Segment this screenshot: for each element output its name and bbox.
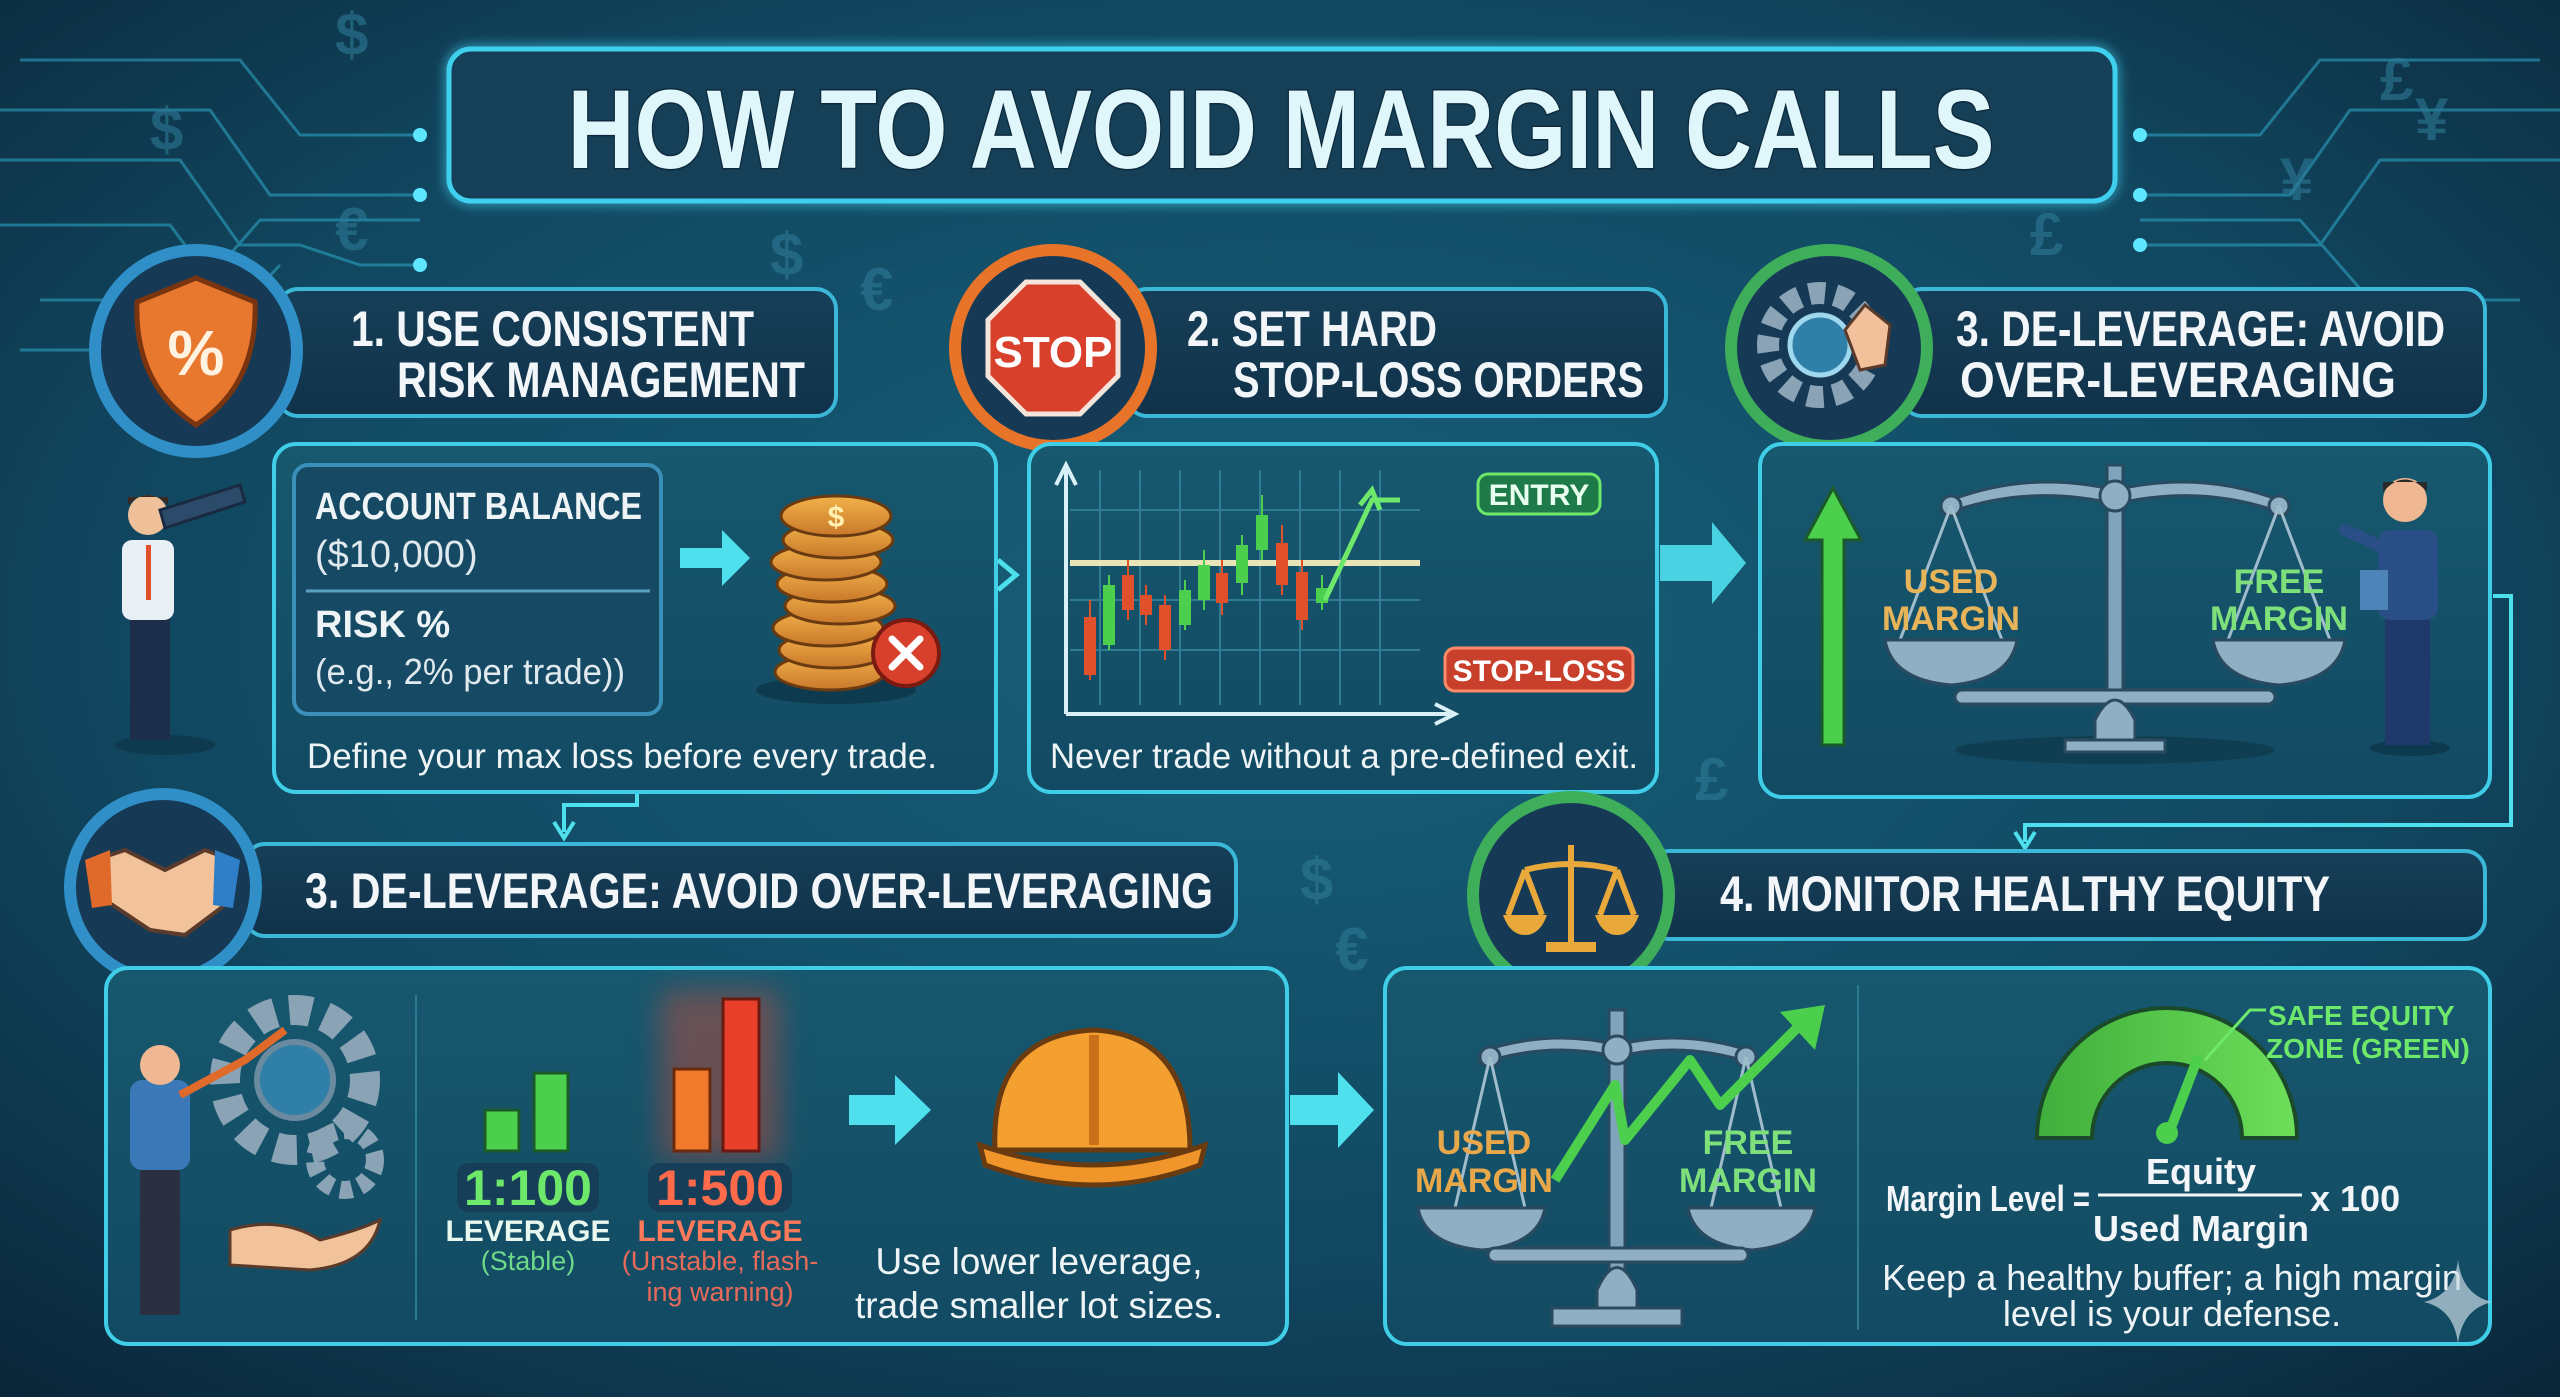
formula: x 100 [2310,1178,2400,1219]
header: step 2: 2. SET HARD [1187,301,1437,357]
header: step 1 [278,289,836,416]
panel: risk management [274,444,996,792]
arrow [680,530,750,586]
formula: Margin Level = [1886,1178,2090,1219]
connector arrow panel1 to panel2 [998,560,1016,590]
label: free margin [2210,563,2348,638]
connector arrow panel2 to panel3 [1660,522,1746,604]
chart: 1:500 leverage bars: 1:500 [656,1160,784,1216]
icon: gear with hand [1731,250,1927,446]
label: used margin: MARGIN [1882,600,2020,638]
header: step 2 [1127,289,1666,416]
panel: healthy equity [1385,968,2490,1344]
icon: gold scales [1473,797,1669,993]
icon: businessman [2345,478,2450,756]
caption [855,1241,1223,1326]
label: free margin: FREE [1703,1124,1793,1162]
panel: de-leverage scale [1760,444,2490,797]
icon: balance scale [1885,465,2345,764]
label: used margin: MARGIN [1415,1162,1553,1200]
text: € [860,256,893,323]
text block: account balance box: RISK % [315,604,450,646]
header: step 3 top: OVER-LEVERAGING [1960,352,2396,408]
label: used margin [1882,563,2020,638]
icon: shield percent [95,250,297,452]
chart: 1:100 leverage bars: 1:100 [464,1160,592,1216]
caption: Define your max loss before every trade. [307,737,937,776]
label: used margin [1415,1124,1553,1200]
header: step 3 top [1902,289,2485,416]
chart: 1:100 leverage bars: (Stable) [481,1246,575,1276]
label: safe equity zone: ZONE (GREEN) [2266,1033,2470,1064]
caption: Never trade without a pre-defined exit. [1050,737,1638,776]
label: used margin: USED [1904,563,1998,601]
icon: stop sign [955,250,1151,446]
label: entry [1478,474,1600,514]
panel: leverage [106,968,1287,1344]
formula: Used Margin [2093,1208,2309,1249]
icon: sparkle [2424,1260,2492,1344]
chart: 1:100 leverage bars [445,1073,611,1276]
header: step 2: STOP-LOSS ORDERS [1233,352,1644,408]
label: free margin: MARGIN [2210,600,2348,638]
icon: green zigzag arrow [1555,1005,1825,1180]
icon: coin stack with x: $ [828,501,845,534]
arrow [849,1075,931,1145]
icon: hard hat [980,1030,1205,1185]
label: free margin: FREE [2234,563,2324,601]
panel: stop-loss chart [1029,444,1657,792]
connector: panel3 to step 4 [2015,596,2511,848]
icon: handshake [70,794,256,980]
label: entry: ENTRY [1489,479,1589,512]
icon: balance scale with growth arrow [1418,1010,1815,1326]
text block: account balance box [294,465,661,714]
label: safe equity zone: SAFE EQUITY [2268,1000,2455,1031]
label: free margin: MARGIN [1679,1162,1817,1200]
chart: 1:500 leverage bars: LEVERAGE [637,1215,803,1248]
header: step 4 [1649,851,2485,939]
text: $ [770,221,803,288]
caption: Keep a healthy buffer; a high margin [1882,1257,2462,1298]
icon: coin stack with x [756,496,939,704]
connector arrow panel4 to panel5 [1290,1072,1374,1148]
text block: account balance box: ($10,000) [315,534,478,576]
chart: 1:500 leverage bars [622,990,818,1307]
caption: level is your defense. [2003,1293,2341,1334]
text: € [335,196,368,263]
label: stop-loss: STOP-LOSS [1453,655,1625,688]
header: step 4: 4. MONITOR HEALTHY EQUITY [1720,866,2330,922]
title: HOW TO AVOID MARGIN CALLS [568,67,1994,192]
label: safe equity zone [2266,1000,2470,1064]
header: step 1: RISK MANAGEMENT [397,352,805,408]
icon: gauge [2037,1008,2297,1144]
chart: candlesticks [1056,465,1455,724]
header: step 3 bottom: 3. DE-LEVERAGE: AVOID OVER-LEVERAGING [305,863,1213,919]
text: $ [1300,846,1333,913]
header: step 3 bottom [245,844,1236,936]
icon: shield percent: % [168,317,224,389]
caption [1882,1257,2462,1334]
text: € [1335,916,1368,983]
header: step 3 top: 3. DE-LEVERAGE: AVOID [1956,301,2445,357]
text: £ [2380,46,2413,113]
text: ¥ [2415,86,2449,153]
icon: stop sign: STOP [993,328,1113,377]
label: free margin [1679,1124,1817,1200]
caption: trade smaller lot sizes. [855,1285,1223,1326]
connector: panel1 to step 3 row [554,794,637,838]
label: used margin: USED [1437,1124,1531,1162]
text: £ [2030,201,2063,268]
header: step 1: 1. USE CONSISTENT [351,301,754,357]
chart: 1:100 leverage bars: LEVERAGE [445,1215,611,1248]
text: £ [1695,746,1728,813]
text: $ [150,96,183,163]
chart: 1:500 leverage bars: (Unstable, flash- [622,1246,818,1276]
icon: green up arrow [1805,488,1861,745]
text block: account balance box: (e.g., 2% per trade)) [315,651,625,692]
text: $ [335,1,368,68]
icon: man with telescope [115,485,245,755]
formula [1886,1151,2400,1249]
icon: man with gears [130,1010,380,1315]
caption: Use lower leverage, [876,1241,1202,1282]
formula: Equity [2146,1151,2256,1192]
text: ¥ [2280,146,2314,213]
chart: 1:500 leverage bars: ing warning) [646,1277,794,1307]
text block: account balance box: ACCOUNT BALANCE [315,486,642,528]
